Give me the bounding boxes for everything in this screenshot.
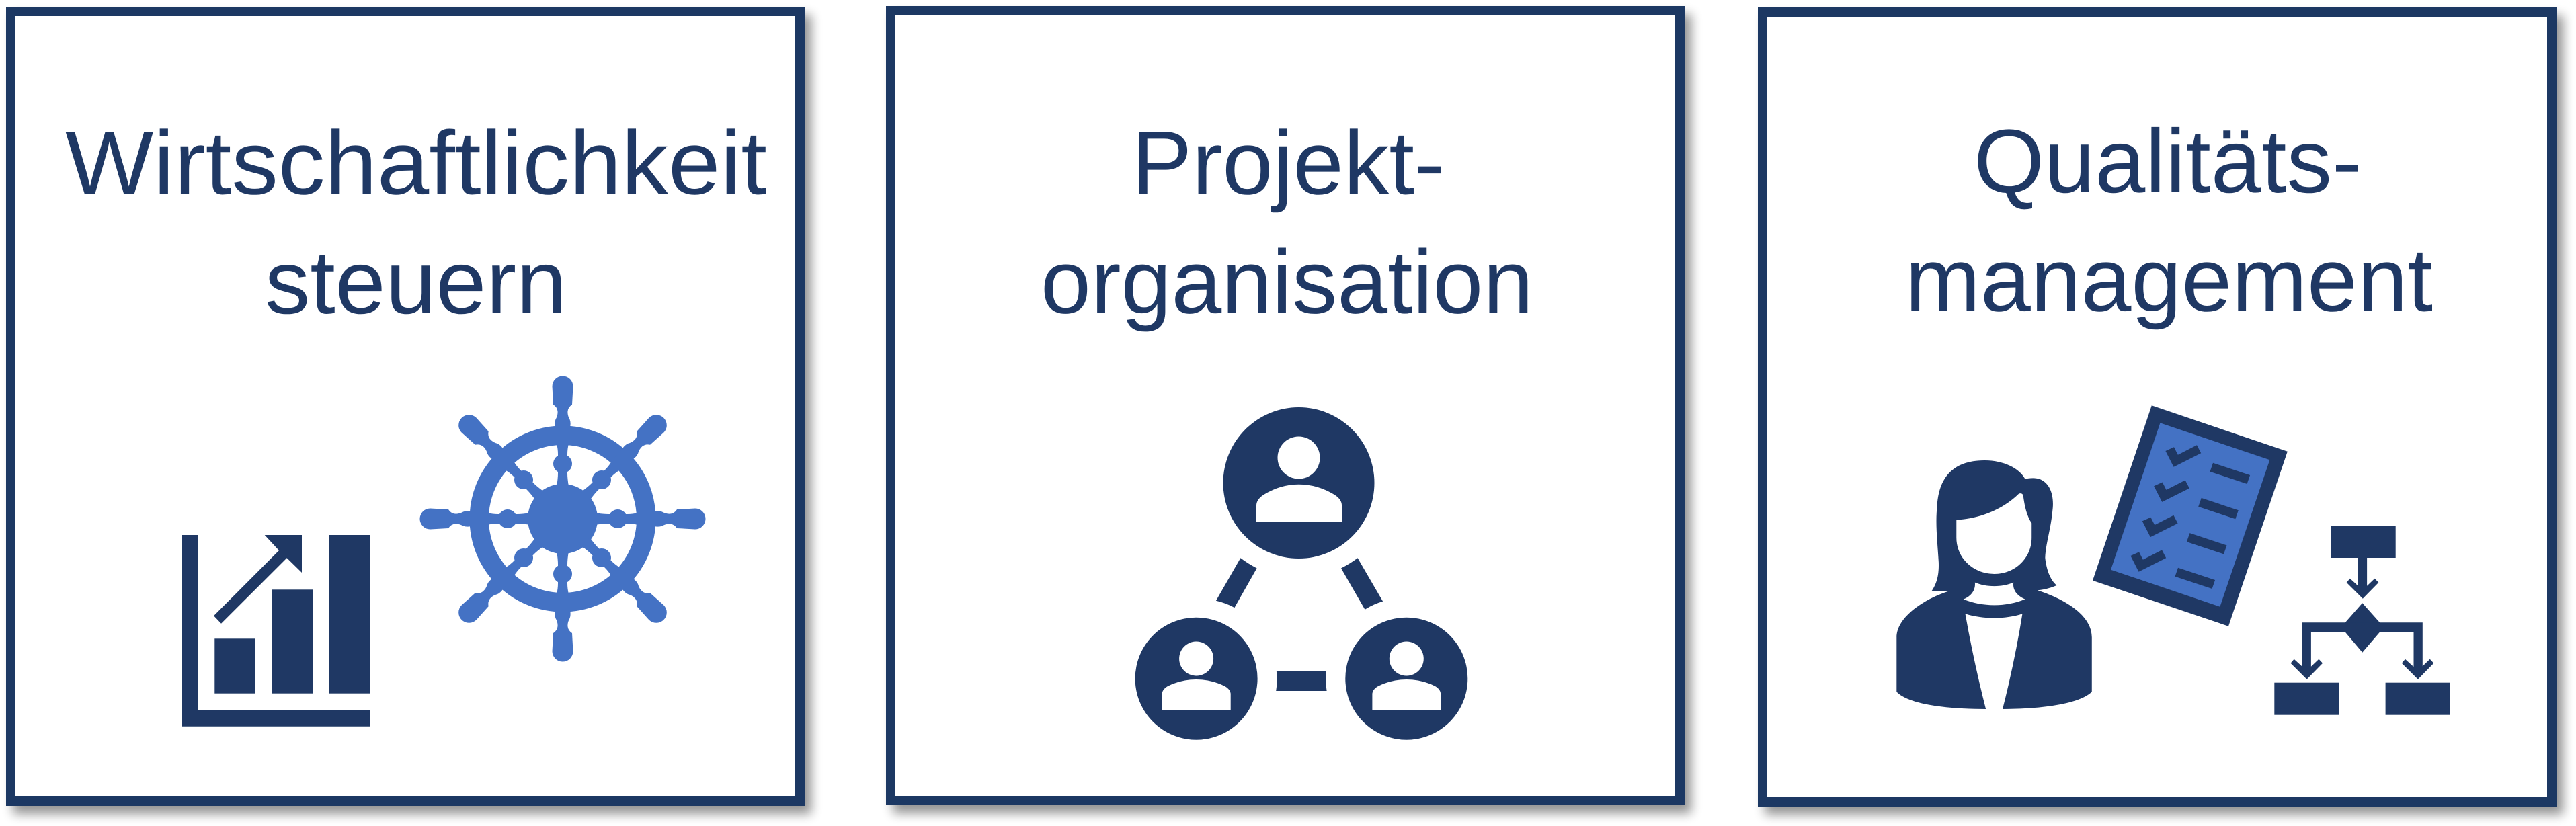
checklist row 3 xyxy=(2142,515,2226,554)
heading: Qualitätsmanagement: Qualitäts- xyxy=(1974,112,2362,212)
person: bottom right circle xyxy=(1345,618,1467,740)
panel: Projektorganisation xyxy=(891,11,1680,800)
icon: bar chart with rising arrow xyxy=(182,535,370,727)
heading: Wirtschaftlichkeit steuern xyxy=(65,113,767,333)
panel frame: Qualitätsmanagement xyxy=(1763,12,2552,802)
panel: Qualitätsmanagement xyxy=(1763,12,2552,802)
connector: left xyxy=(1216,558,1257,608)
person: bottom left circle xyxy=(1135,618,1258,740)
heading: Projektorganisation: organisation xyxy=(1041,233,1533,333)
heading: Projektorganisation: Projekt- xyxy=(1131,113,1445,214)
icon: process flowchart xyxy=(2274,526,2450,715)
panel frame: Wirtschaftlichkeit xyxy=(11,11,800,801)
icon: woman xyxy=(1896,460,2092,710)
icon: checklist clipboard xyxy=(2093,405,2288,626)
heading: Wirtschaftlichkeit steuern: steuern xyxy=(265,233,567,333)
heading: Projektorganisation xyxy=(1041,113,1533,333)
icon: ship steering wheel xyxy=(419,376,706,661)
connector: bottom xyxy=(1276,671,1327,691)
heading: Qualitätsmanagement: management xyxy=(1905,230,2433,331)
checklist row 4 xyxy=(2130,550,2215,589)
heading: Qualitätsmanagement xyxy=(1905,112,2433,331)
panel frame: Projektorganisation xyxy=(891,11,1680,800)
checklist row 1 xyxy=(2165,445,2250,484)
person: top circle xyxy=(1223,407,1374,559)
icon: three connected people xyxy=(1135,407,1467,740)
checklist row 2 xyxy=(2154,480,2239,519)
connector: right xyxy=(1341,558,1383,610)
panel: Wirtschaftlichkeit steuern xyxy=(11,11,800,801)
heading: Wirtschaftlichkeit steuern: Wirtschaftlichkeit xyxy=(65,113,767,214)
